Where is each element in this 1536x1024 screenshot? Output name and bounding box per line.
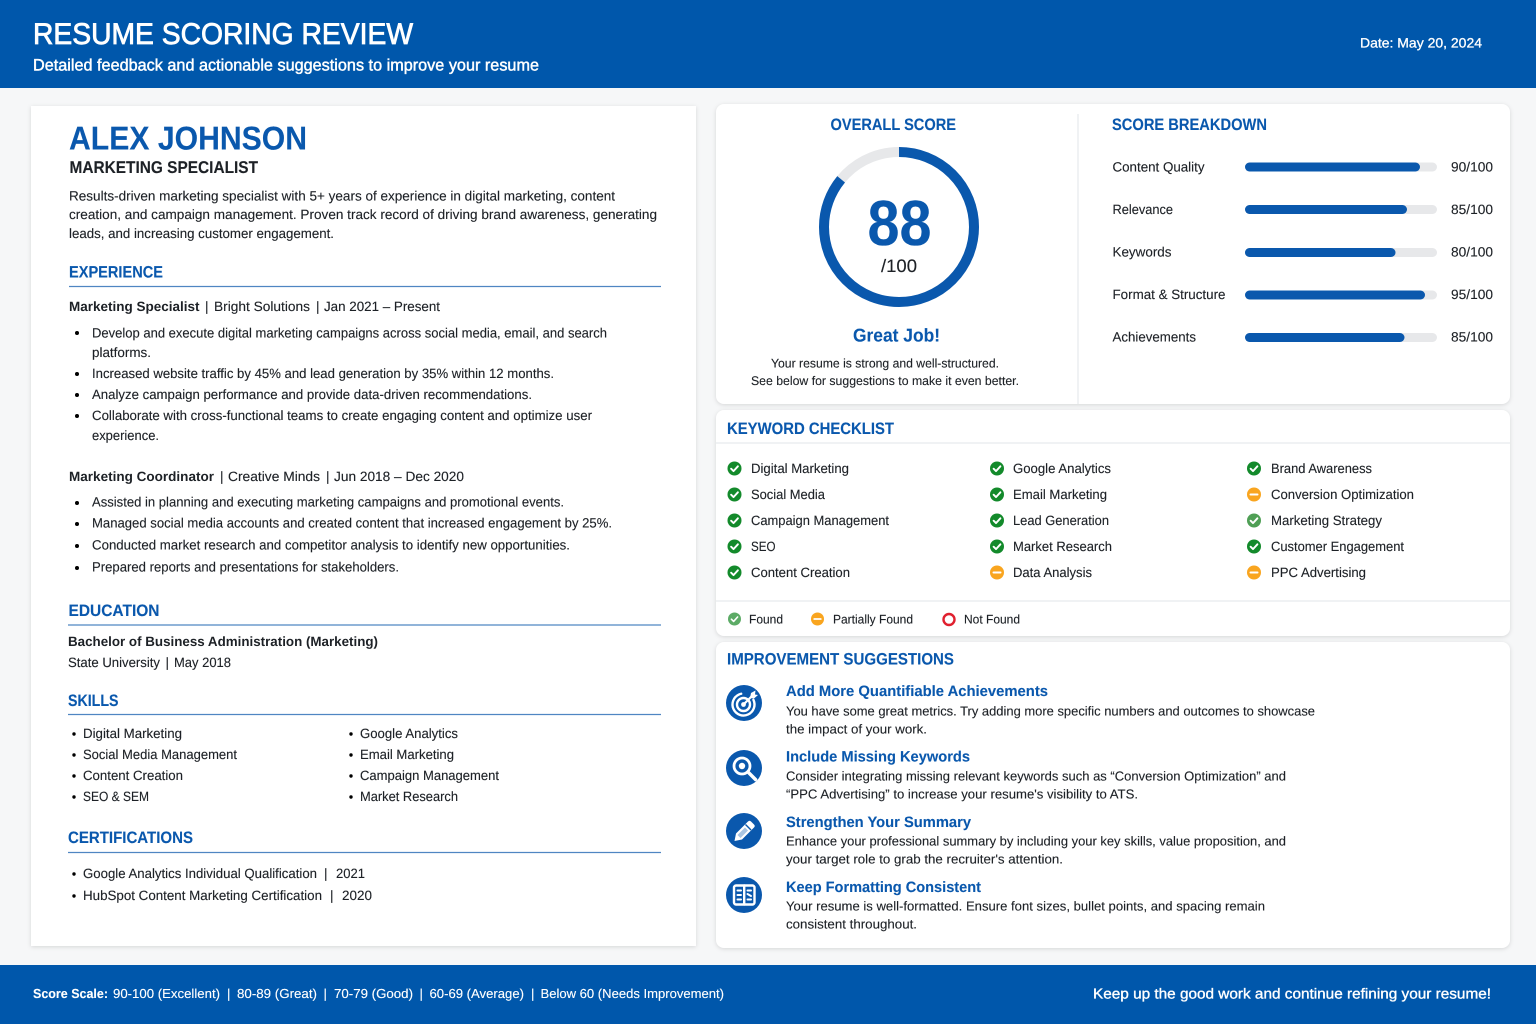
row: relevance: Relevance	[1112, 202, 1173, 217]
subtitle: Detailed feedback and actionable suggestions to improve your resume	[33, 56, 539, 74]
job 2: Prepared reports and presentations for stakeholders.	[92, 560, 399, 574]
row: content quality: 90/100	[1451, 160, 1493, 174]
score breakdown: SCORE BREAKDOWN	[1112, 116, 1267, 134]
keyword column 1: Social Media	[751, 487, 825, 502]
candidate name: ALEX JOHNSON	[69, 120, 307, 156]
score number: 88	[868, 187, 932, 259]
score scale: 70-79 (Good)	[334, 986, 413, 1001]
row: achievements	[1112, 330, 1493, 344]
job 2: Conducted market research and competitor analysis to identify new opportunities.	[92, 538, 570, 552]
keyword column 3	[1247, 461, 1414, 580]
job 1: Marketing Specialist	[69, 299, 200, 314]
overall score: OVERALL SCORE	[830, 116, 956, 134]
suggestion: keywords	[726, 748, 1286, 802]
experience heading: EXPERIENCE	[69, 264, 163, 282]
row: relevance: 85/100	[1451, 202, 1493, 217]
keyword column 1: Content Creation	[751, 565, 850, 580]
suggestion: formatting	[726, 877, 1265, 932]
keyword heading: KEYWORD CHECKLIST	[727, 420, 894, 438]
keyword column 2: Data Analysis	[1013, 565, 1092, 580]
job 1: Develop and execute digital marketing campaigns across social media, email, and search	[92, 326, 607, 340]
score scale: 90-100 (Excellent)	[113, 986, 220, 1001]
legend	[728, 612, 1020, 626]
date: Date: May 20, 2024	[1360, 36, 1483, 50]
suggestion: formatting: consistent throughout.	[786, 916, 917, 932]
certifications section: CERTIFICATIONS	[68, 829, 193, 847]
suggestion: keywords: Consider integrating missing relevant keywords such as “Conversion Optimization” and	[786, 768, 1286, 784]
score scale: |	[227, 986, 230, 1001]
skills section: SEO & SEM	[83, 789, 149, 804]
suggestion: formatting: Keep Formatting Consistent	[786, 879, 981, 896]
row: format and structure: Format & Structure	[1112, 287, 1226, 302]
row: achievements: 85/100	[1451, 330, 1493, 344]
title: RESUME SCORING REVIEW	[33, 18, 414, 51]
job 2: Marketing Coordinator	[69, 469, 215, 484]
score scale: |	[531, 986, 534, 1001]
score denominator: /100	[881, 256, 917, 276]
skills section: Campaign Management	[360, 768, 499, 783]
certifications section: |	[330, 888, 334, 903]
job 2: |	[326, 469, 330, 484]
summary text: creation, and campaign management. Proven track record of driving brand awareness, generating	[69, 207, 657, 222]
job 2: Creative Minds	[228, 469, 320, 484]
keyword column 1	[728, 461, 889, 580]
skills section: Content Creation	[83, 768, 183, 783]
certifications section: 2020	[342, 888, 372, 903]
skills section: Email Marketing	[360, 747, 454, 762]
panel: scores	[716, 104, 1510, 404]
panel: resume	[31, 106, 696, 946]
candidate role: MARKETING SPECIALIST	[70, 158, 259, 177]
certifications section: HubSpot Content Marketing Certification	[83, 888, 322, 903]
job 1: |	[205, 299, 209, 314]
job 2	[69, 469, 612, 574]
suggestion: formatting: Your resume is well-formatted. Ensure font sizes, bullet points, and spacing remain	[786, 898, 1265, 914]
education section: EDUCATION	[68, 602, 160, 620]
score scale	[33, 986, 724, 1001]
suggestion: achievements: the impact of your work.	[786, 722, 927, 736]
job 1: Increased website traffic by 45% and lead generation by 35% within 12 months.	[92, 366, 554, 381]
row: content quality	[1112, 160, 1493, 174]
education section: State University	[68, 655, 160, 670]
job 1: experience.	[92, 428, 159, 443]
row: format and structure	[1112, 287, 1493, 302]
suggestions heading: IMPROVEMENT SUGGESTIONS	[727, 650, 954, 668]
suggestion: summary	[726, 813, 1286, 866]
keyword column 3: Marketing Strategy	[1271, 513, 1382, 528]
verdict text	[751, 356, 1019, 388]
summary text: leads, and increasing customer engagement.	[69, 226, 334, 241]
education section: |	[166, 655, 169, 670]
keyword column 2: Lead Generation	[1013, 513, 1109, 528]
legend: Partially Found	[833, 612, 913, 626]
score breakdown	[1112, 116, 1493, 344]
suggestion: summary: your target role to grab the recruiter's attention.	[786, 852, 1063, 866]
keyword column 2: Market Research	[1013, 539, 1112, 554]
score scale: |	[324, 986, 327, 1001]
suggestion: keywords: “PPC Advertising” to increase your resume's visibility to ATS.	[786, 786, 1138, 802]
keyword column 1: Digital Marketing	[751, 461, 849, 476]
skills section: Digital Marketing	[83, 726, 182, 741]
header banner	[0, 0, 1536, 88]
suggestion: achievements	[726, 683, 1315, 736]
row: achievements: Achievements	[1112, 330, 1196, 344]
panel: improvement suggestions	[716, 642, 1510, 948]
certifications section	[68, 829, 661, 903]
score ring	[824, 152, 974, 302]
certifications section: |	[324, 866, 328, 881]
keyword column 3: Customer Engagement	[1271, 539, 1404, 554]
score scale: |	[420, 986, 423, 1001]
footer banner	[0, 965, 1536, 1024]
score scale: 80-89 (Great)	[237, 986, 317, 1001]
closing message: Keep up the good work and continue refining your resume!	[1093, 986, 1491, 1002]
keyword column 2	[990, 461, 1112, 580]
certifications section: Google Analytics Individual Qualification	[83, 866, 317, 881]
skills section	[68, 692, 661, 804]
score scale: 60-69 (Average)	[430, 986, 524, 1001]
education section: May 2018	[174, 655, 231, 670]
keyword column 3: Brand Awareness	[1271, 461, 1372, 476]
job 2: Jun 2018 – Dec 2020	[334, 469, 464, 484]
row: content quality: Content Quality	[1112, 160, 1205, 174]
panel: keyword checklist	[716, 410, 1510, 636]
suggestion: achievements: You have some great metrics. Try adding more specific numbers and outcomes to showcase	[786, 704, 1315, 718]
icon: layout	[726, 877, 762, 913]
row: keywords: 80/100	[1451, 244, 1493, 260]
icon: target	[726, 685, 762, 721]
skills section: SKILLS	[68, 692, 118, 710]
keyword column 1: SEO	[751, 539, 776, 554]
summary text	[69, 188, 657, 241]
job 1: Collaborate with cross-functional teams to create engaging content and optimize user	[92, 408, 592, 423]
job 2: |	[220, 469, 224, 484]
skills section: Google Analytics	[360, 726, 458, 741]
row: format and structure: 95/100	[1451, 287, 1493, 302]
job 1: Bright Solutions	[214, 299, 310, 314]
skills section: Market Research	[360, 789, 458, 804]
keyword column 3: Conversion Optimization	[1271, 487, 1414, 502]
verdict: Great Job!	[853, 324, 940, 346]
job 1: Jan 2021 – Present	[324, 299, 440, 314]
legend: Not Found	[964, 612, 1020, 626]
suggestion: summary: Strengthen Your Summary	[786, 814, 972, 831]
suggestion: summary: Enhance your professional summary by including your key skills, value proposition, and	[786, 834, 1286, 848]
job 1	[69, 299, 607, 443]
verdict text: Your resume is strong and well-structured.	[771, 356, 999, 370]
keyword column 3: PPC Advertising	[1271, 565, 1366, 580]
job 1: Analyze campaign performance and provide data-driven recommendations.	[92, 387, 532, 402]
education section: Bachelor of Business Administration (Marketing)	[68, 634, 378, 649]
legend: Found	[749, 612, 783, 626]
keyword column 2: Email Marketing	[1013, 487, 1107, 502]
keyword column 2: Google Analytics	[1013, 461, 1111, 476]
skills section: Social Media Management	[83, 747, 237, 762]
job 1: platforms.	[92, 345, 151, 360]
job 2: Managed social media accounts and created content that increased engagement by 25%.	[92, 516, 612, 530]
education section	[68, 602, 661, 670]
row: keywords	[1112, 244, 1493, 260]
job 2: Assisted in planning and executing marketing campaigns and promotional events.	[92, 494, 564, 510]
icon: magnifier	[726, 750, 762, 786]
keyword column 1: Campaign Management	[751, 513, 889, 528]
suggestion: keywords: Include Missing Keywords	[786, 748, 970, 766]
job 1: |	[316, 299, 320, 314]
certifications section: 2021	[336, 866, 365, 881]
suggestion: achievements: Add More Quantifiable Achievements	[786, 683, 1048, 700]
summary text: Results-driven marketing specialist with 5+ years of experience in digital marketing, content	[69, 188, 615, 204]
row: keywords: Keywords	[1112, 244, 1172, 260]
row: relevance	[1112, 202, 1493, 217]
icon: pencil	[726, 813, 762, 849]
verdict text: See below for suggestions to make it even better.	[751, 374, 1019, 388]
score scale: Below 60 (Needs Improvement)	[540, 986, 724, 1001]
overall score	[751, 116, 1019, 388]
score scale: Score Scale:	[33, 986, 108, 1001]
